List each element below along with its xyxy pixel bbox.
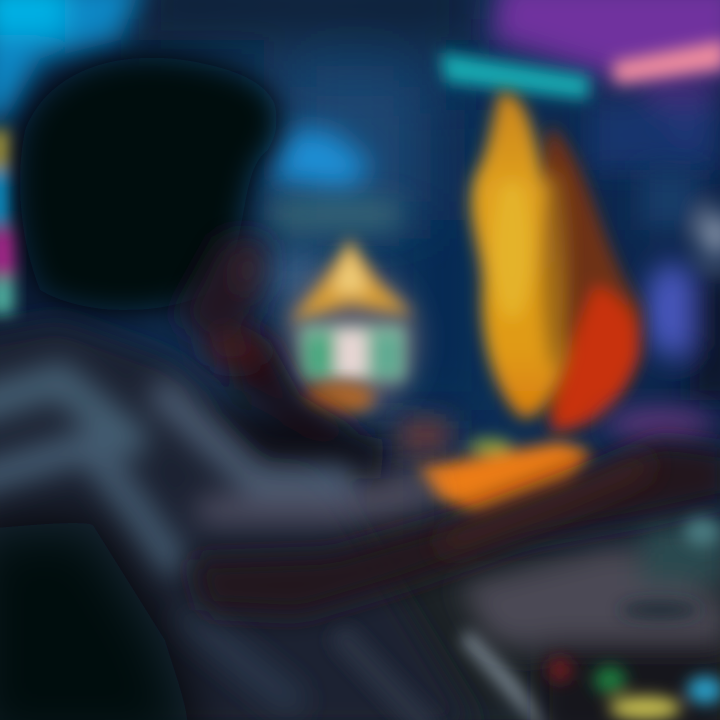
outstretched arm [190,440,720,615]
left edge colour strip [0,130,16,316]
right side blue and violet glows [640,170,720,400]
top-left cyan glow [0,0,145,120]
lower-left shadow [0,520,200,720]
purple hand glow [400,409,715,450]
bottom-right coloured keys [548,518,720,720]
yellow glowing figure [471,92,569,418]
shirt stripes [0,380,420,700]
lantern roof [290,238,414,322]
teal light bar [440,52,590,100]
top dark band [130,0,480,410]
person head silhouette [20,58,277,310]
hazy band above lantern [270,200,400,300]
chair stripes at the bottom [345,640,545,720]
blue cloud glow [270,130,372,190]
red-orange figure back [535,125,642,432]
person body [0,310,480,720]
bottom dark floor [0,440,720,720]
lantern body [300,325,406,381]
lantern base [302,382,374,414]
face in shadow [175,235,270,368]
forearm highlight [440,462,650,545]
lantern glow [282,268,418,412]
lantern [282,238,418,414]
keyboard and desk surface [460,520,720,720]
orange glowing base [418,439,592,518]
top-right purple and pink lights [490,0,720,170]
pink light bar [612,40,720,84]
